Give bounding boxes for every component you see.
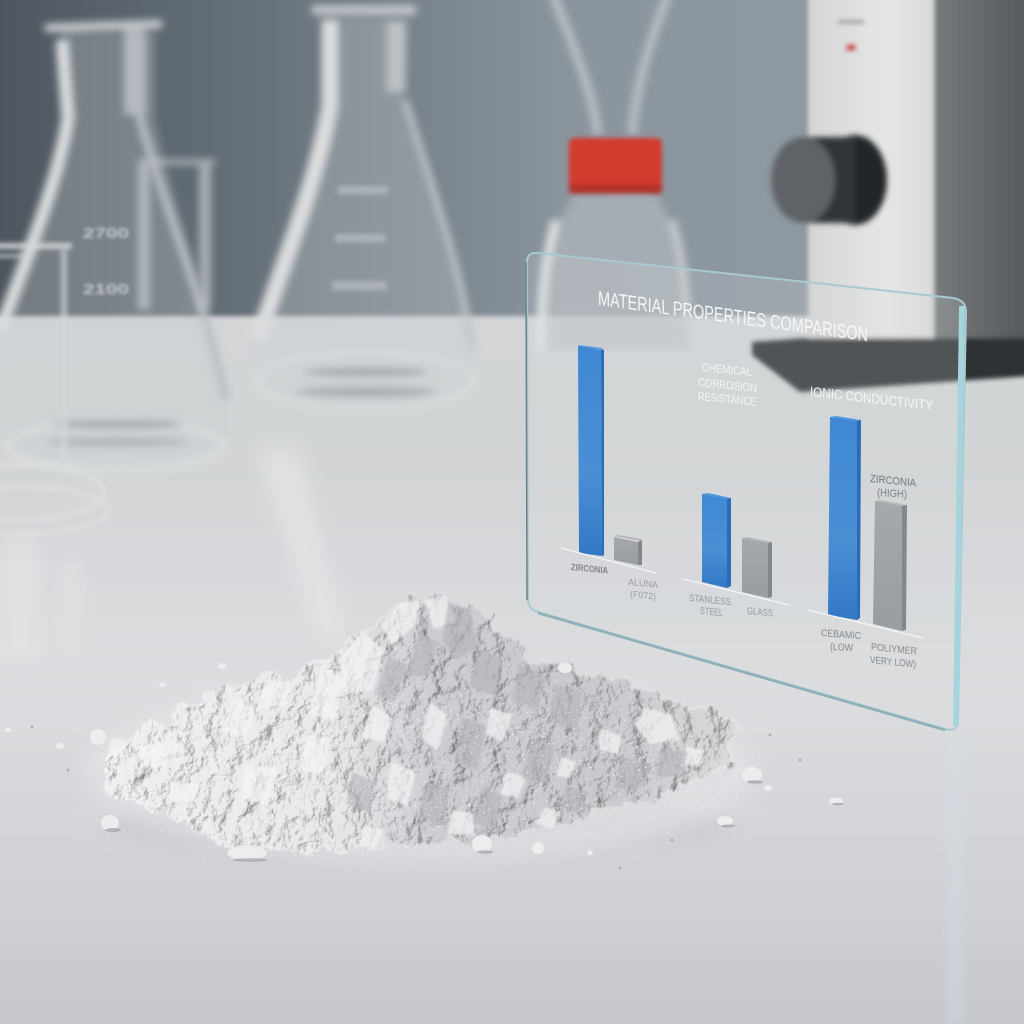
chart heading: ionic conductivity: IONIC CONDUCTIVITY: [810, 383, 934, 413]
right flask graduations: [332, 186, 388, 290]
pile lit facets: [108, 596, 704, 848]
chart group: ceramic vs polymer: [808, 416, 923, 671]
bottle with red cap: [540, 0, 690, 350]
back beaker: [138, 162, 215, 310]
chart group: stainless steel vs glass: [683, 493, 789, 620]
left flask graduation labels: 2100: [83, 281, 129, 298]
bottle red cap: [569, 138, 662, 194]
machine red indicator: [846, 44, 856, 51]
left conical flask: [0, 24, 228, 469]
chart group: ceramic vs polymer: CEBAMIC: [821, 627, 861, 642]
chart group: stainless steel vs glass: GLASS: [747, 605, 773, 620]
table reflections: [0, 450, 345, 660]
pile body: [100, 596, 735, 850]
chart group: zirconia vs alumina: [561, 345, 659, 603]
panel glass sheet: [527, 253, 966, 730]
chart heading: chemical corrosion resistance: CHEMICAL: [702, 362, 752, 379]
chart group: ceramic vs polymer: (HIGH): [877, 487, 907, 501]
panel title: MATERIAL PROPERTIES COMPARISON: [598, 288, 868, 346]
chart group: ceramic vs polymer: (LOW: [830, 641, 853, 654]
table surface: [0, 316, 1024, 1024]
machine base plate: [752, 338, 1024, 392]
left flask graduation labels: [83, 225, 129, 298]
panel right edge: [956, 306, 962, 726]
chart heading: chemical corrosion resistance: [698, 362, 757, 409]
chart group: ceramic vs polymer: POLIYMER: [871, 641, 917, 658]
left flask graduation labels: 2700: [83, 225, 129, 242]
chart group: zirconia vs alumina: ALUNA: [628, 577, 659, 591]
chart group: zirconia vs alumina: (F072): [630, 589, 656, 603]
powder pile: [100, 596, 735, 850]
background wall: [0, 0, 1024, 340]
chart group: stainless steel vs glass: STANLESS: [689, 592, 731, 608]
glass reflection on table: [946, 735, 964, 1024]
scattered powder granules: [5, 663, 844, 870]
powder dust halo: [85, 675, 755, 865]
right conical flask: [252, 10, 476, 412]
machine: white instrument housing: [752, 0, 1024, 392]
bottle body: [540, 192, 690, 350]
chart group: ceramic vs polymer: ZIRCONIA: [870, 473, 917, 490]
chart group: stainless steel vs glass: STEEL: [700, 605, 723, 619]
bottle tubes: [553, 0, 668, 135]
pile shaded facets: [346, 602, 688, 830]
glass panel: [526, 253, 966, 730]
chart group: ceramic vs polymer: VERY LOW): [870, 654, 916, 671]
machine knob: [771, 135, 887, 225]
petri dish: [0, 464, 108, 534]
chart heading: chemical corrosion resistance: CORROSION: [698, 377, 757, 395]
chart group: zirconia vs alumina: ZIRCONIA: [571, 562, 608, 577]
powder pile shadow: [110, 791, 730, 859]
chart heading: chemical corrosion resistance: RESISTANCE: [698, 391, 756, 409]
front left beaker: [0, 246, 72, 465]
fine powder specks: [70, 680, 770, 870]
